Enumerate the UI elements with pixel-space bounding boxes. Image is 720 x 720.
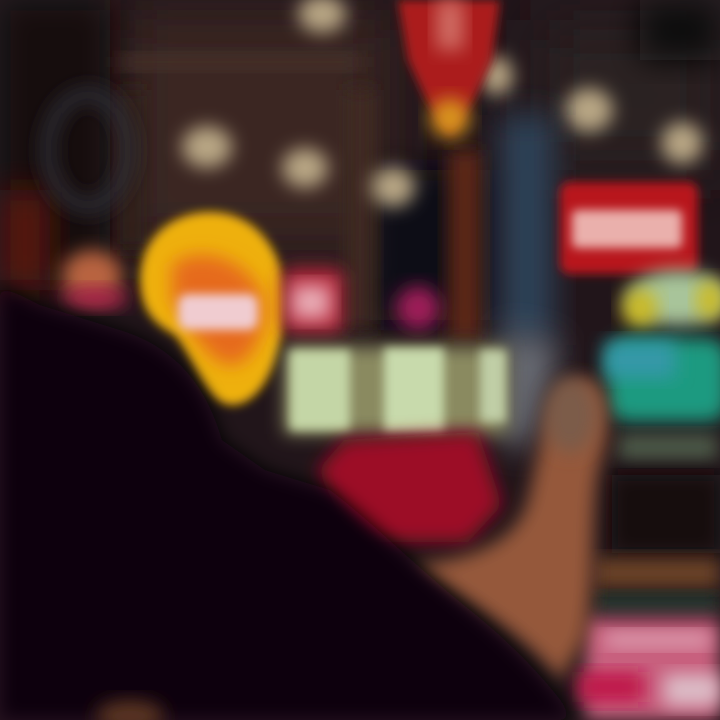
ceiling lights xyxy=(182,0,703,207)
magenta item xyxy=(396,286,440,330)
hanging red banner xyxy=(398,0,500,138)
lower right stall xyxy=(578,475,720,720)
yellow round sign xyxy=(140,212,285,405)
stall glow left xyxy=(61,250,129,309)
pale green display panels xyxy=(284,346,508,434)
pink sign xyxy=(282,268,344,334)
colourful stall right xyxy=(605,270,720,460)
person silhouette xyxy=(0,285,575,720)
red cloth xyxy=(318,432,502,542)
hand and forearm xyxy=(410,377,607,680)
ear xyxy=(48,94,128,206)
phone held up xyxy=(500,115,560,450)
red sign right xyxy=(560,182,698,274)
